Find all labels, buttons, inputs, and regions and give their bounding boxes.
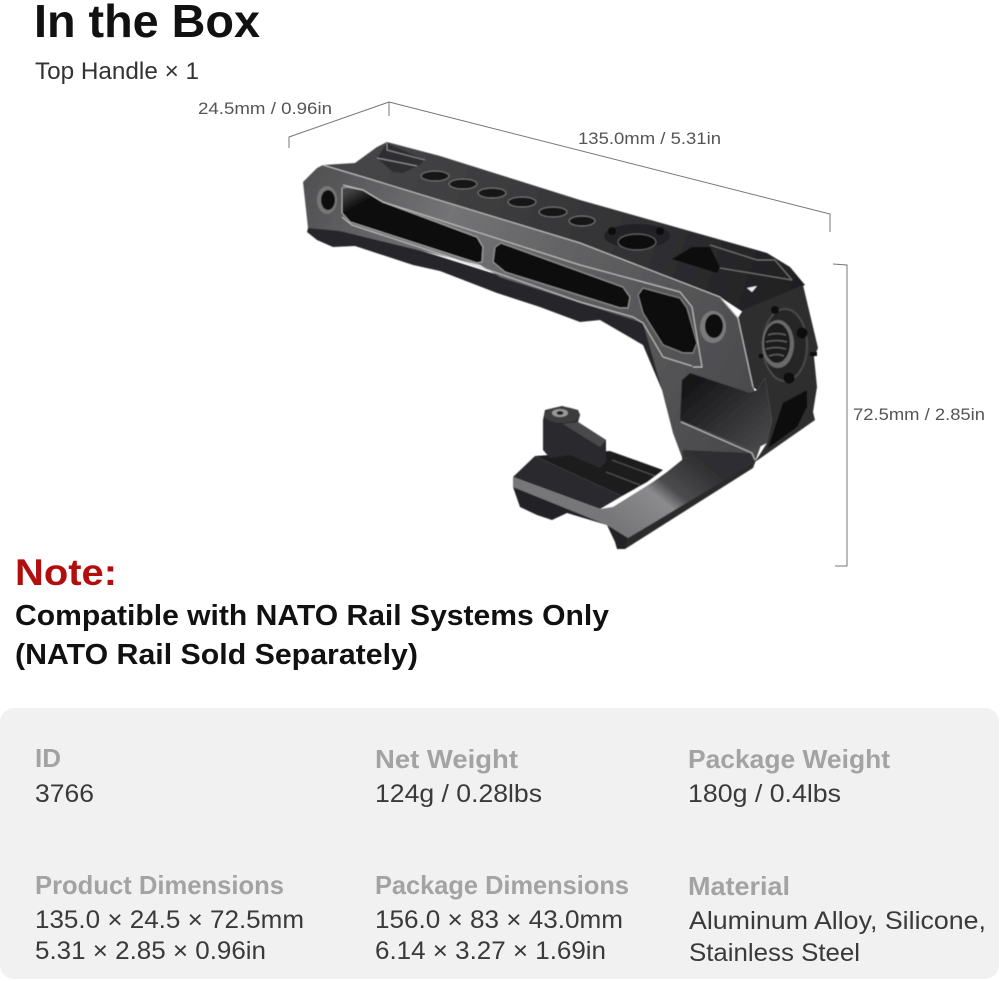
dimension: depth: 24.5mm / 0.96in <box>198 99 332 118</box>
spec: package dimensions: 156.0 × 83 × 43.0mm <box>375 906 623 934</box>
spec: net weight: Net Weight <box>375 744 518 774</box>
side holes <box>317 186 337 214</box>
note text: Compatible with NATO Rail Systems Only <box>15 600 609 632</box>
front face <box>738 285 818 462</box>
front socket hole <box>762 320 794 368</box>
spec: package dimensions <box>375 870 629 965</box>
spec: ID: ID <box>35 743 61 773</box>
arm recess <box>680 373 772 450</box>
note text <box>15 600 609 671</box>
spec: package weight <box>688 744 890 808</box>
spec: material: Material <box>688 871 790 901</box>
knob <box>543 406 606 468</box>
spec: material <box>688 871 986 967</box>
top right slot <box>672 247 720 273</box>
spec: ID: 3766 <box>35 780 94 808</box>
product image: top handle <box>303 142 818 549</box>
spec: product dimensions: 135.0 × 24.5 × 72.5mm <box>35 906 304 934</box>
top left block <box>377 143 425 173</box>
spec: product dimensions <box>35 870 304 965</box>
dimension: length: 135.0mm / 5.31in <box>578 129 721 148</box>
top holes <box>421 171 595 226</box>
dimension: length <box>389 102 830 232</box>
dimension: depth <box>198 99 389 148</box>
window 3 <box>638 288 697 353</box>
note text: (NATO Rail Sold Separately) <box>15 639 418 671</box>
spec: material: Stainless Steel <box>689 939 860 967</box>
recess lower highlight <box>681 422 755 460</box>
spec: net weight: 124g / 0.28lbs <box>375 780 542 808</box>
spec: package dimensions: Package Dimensions <box>375 870 629 900</box>
note heading: Note: <box>15 552 117 593</box>
spec: material: Aluminum Alloy, Silicone, <box>689 907 986 935</box>
rail <box>535 451 663 496</box>
dimension: height <box>833 264 985 566</box>
top mount hole <box>604 224 670 248</box>
front socket flange <box>763 309 807 381</box>
plate <box>513 450 755 538</box>
grip <box>307 225 662 390</box>
highlight lines <box>323 165 753 387</box>
spec: package weight: 180g / 0.4lbs <box>688 780 841 808</box>
spec: product dimensions: Product Dimensions <box>35 870 284 900</box>
top face <box>323 142 805 312</box>
panel: specifications <box>0 708 999 979</box>
spec: package weight: Package Weight <box>688 744 890 774</box>
lower slot <box>768 390 807 448</box>
side face <box>303 165 768 462</box>
spec: net weight <box>375 744 542 808</box>
dimension: height: 72.5mm / 2.85in <box>853 405 985 424</box>
spec: package dimensions: 6.14 × 3.27 × 1.69in <box>375 937 606 965</box>
spec: ID <box>35 743 94 808</box>
plate underside <box>625 460 756 549</box>
rail top <box>513 456 622 509</box>
window 2 <box>493 243 630 308</box>
window 1 <box>342 187 483 263</box>
spec: product dimensions: 5.31 × 2.85 × 0.96in <box>35 937 266 965</box>
subtitle: box contents: Top Handle × 1 <box>35 58 199 85</box>
foot underside <box>513 487 640 549</box>
